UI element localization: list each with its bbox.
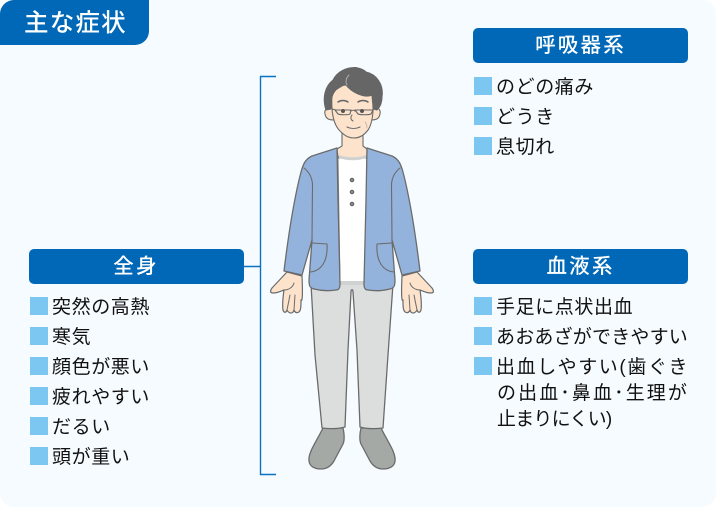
- symptom: poor complexion: 顔色が悪い: [52, 357, 150, 378]
- symptom: bleeding line 3: 止まりにくい): [497, 409, 611, 430]
- symptom: listlessness: だるい: [52, 417, 111, 438]
- heading: respiratory: [473, 28, 688, 62]
- symptom: sudden high fever: 突然の高熱: [52, 297, 150, 318]
- symptom: bleeding line 2: の出血･鼻血･生理が: [497, 383, 689, 404]
- heading: blood: 血液系: [546, 255, 615, 278]
- symptom: heavy head: 頭が重い: [52, 447, 130, 468]
- symptom: palpitations: どうき: [496, 107, 555, 128]
- symptom: fatigue: 疲れやすい: [52, 387, 150, 408]
- hair: [324, 67, 382, 110]
- panel: blood: [473, 249, 689, 430]
- shirt buttons: [350, 178, 354, 206]
- jacket: [284, 148, 420, 291]
- symptom: petechiae: 手足に点状出血: [496, 297, 633, 318]
- symptom: chills: 寒気: [52, 327, 91, 348]
- symptom: shortness of breath: 息切れ: [496, 137, 555, 158]
- title tab: main symptoms: 主な症状: [24, 10, 127, 37]
- heading: whole body: 全身: [113, 255, 159, 278]
- symptom: bleeding easily: 出血しやすい(歯ぐき: [496, 357, 689, 378]
- shoes: [309, 428, 395, 469]
- ears: [325, 107, 334, 120]
- neck and face: [337, 128, 367, 159]
- heading: blood: [473, 249, 688, 284]
- panel: respiratory: [473, 28, 688, 158]
- brows, eyes, glasses, nose, mouth: [332, 100, 373, 128]
- symptom: sore throat: のどの痛み: [496, 77, 594, 98]
- trousers: [311, 284, 393, 429]
- symptom: bruising: あおあざができやすい: [496, 327, 688, 348]
- hands: [271, 272, 433, 313]
- heading: respiratory: 呼吸器系: [535, 34, 626, 57]
- panel: whole body: [29, 249, 244, 468]
- title tab: main symptoms: [0, 0, 149, 45]
- shirt: [338, 158, 367, 283]
- heading: whole body: [28, 249, 244, 284]
